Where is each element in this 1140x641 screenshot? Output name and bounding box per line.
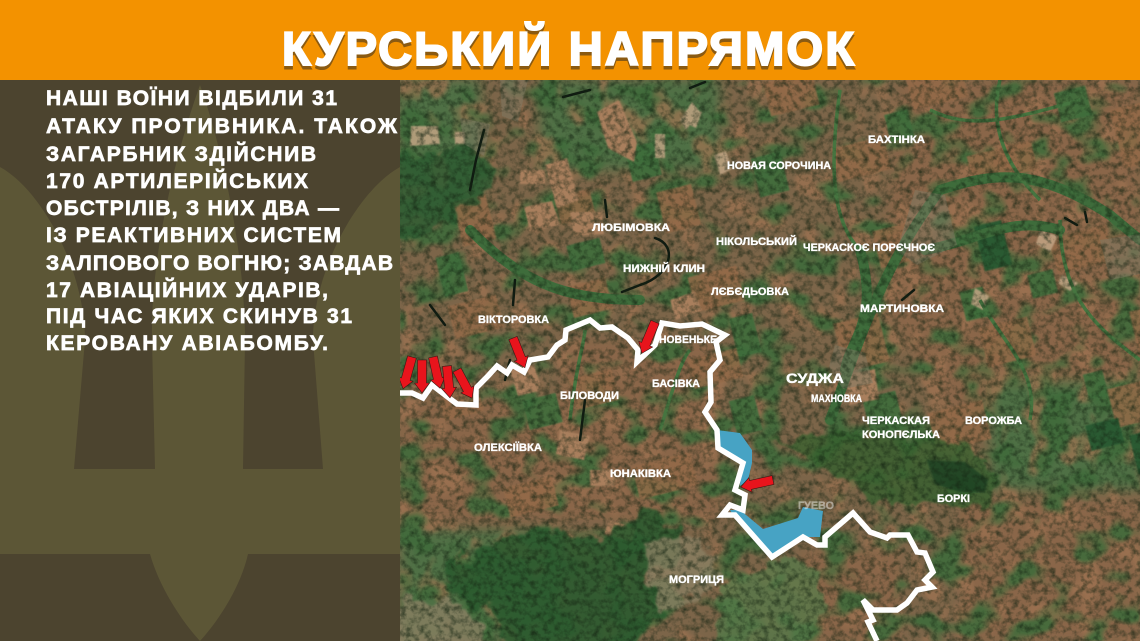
settlement labels: БОРКІ <box>937 493 970 505</box>
left text panel with trident background <box>0 80 400 641</box>
grey settlement patches <box>460 80 1140 389</box>
dark water lines <box>430 82 1087 440</box>
settlement labels: БАСІВКА <box>652 378 700 390</box>
top left forest <box>385 150 490 240</box>
green river valleys <box>470 177 1140 420</box>
body text block: КЕРОВАНУ АВІАБОМБУ. <box>46 332 328 355</box>
settlement labels: ЛЮБІМОВКА <box>592 222 670 234</box>
body text block: ІЗ РЕАКТИВНИХ СИСТЕМ <box>46 224 341 247</box>
central forest patches <box>770 430 1000 510</box>
arrow 1 <box>400 356 417 389</box>
settlement labels: БІЛОВОДИ <box>560 390 619 402</box>
body text block <box>46 87 398 355</box>
header bar <box>0 0 1140 80</box>
settlement labels: МАХНОВКА <box>811 393 862 405</box>
arrow 6 <box>508 336 528 368</box>
arrow 2 <box>414 360 430 393</box>
title: КУРСЬКИЙ НАПРЯМОК <box>282 22 854 75</box>
body text block: 17 АВІАЦІЙНИХ УДАРІВ, <box>46 278 328 302</box>
dark wood near Borki <box>927 460 988 492</box>
arrow 8 <box>740 475 774 493</box>
body text block: АТАКУ ПРОТИВНИКА. ТАКОЖ <box>46 115 398 138</box>
tilled and pale plots <box>410 100 1078 542</box>
settlement labels: ВОРОЖБА <box>965 415 1022 427</box>
settlement labels <box>474 134 1022 586</box>
settlement labels: ГУЕВО <box>798 500 834 512</box>
body text block: ЗАГАРБНИК ЗДІЙСНИВ <box>46 142 316 166</box>
red attack arrows <box>396 319 775 494</box>
body text block: ПІД ЧАС ЯКИХ СКИНУВ 31 <box>46 305 352 328</box>
body text block: ОБСТРІЛІВ, З НИХ ДВА — <box>46 197 339 220</box>
settlement labels: БАХТІНКА <box>868 134 925 146</box>
settlement labels: НІКОЛЬСЬКИЙ <box>716 235 797 248</box>
settlement labels: ЛЄБЄДЬОВКА <box>711 286 789 298</box>
settlement labels: ЮНАКІВКА <box>610 468 671 480</box>
arrow 3 <box>428 356 444 389</box>
body text block: 170 АРТИЛЕРІЙСЬКИХ <box>46 169 308 193</box>
settlement labels: КОНОПЄЛЬКА <box>862 429 940 441</box>
settlement labels: МАРТИНОВКА <box>860 303 944 315</box>
settlement labels: ЧЕРКАСКОЄ ПОРЄЧНОЄ <box>803 242 935 254</box>
satellite map <box>400 80 1140 641</box>
arrow 4 <box>441 365 457 398</box>
settlement labels: СУДЖА <box>786 370 844 386</box>
body text block: НАШІ ВОЇНИ ВІДБИЛИ 31 <box>46 87 337 110</box>
occupied area: blue zones <box>716 430 823 557</box>
settlement labels: НОВАЯ СОРОЧИНА <box>727 160 831 172</box>
settlement labels: МОГРИЦЯ <box>669 574 724 586</box>
settlement labels: ЧЕРКАСКАЯ <box>862 415 930 427</box>
settlement labels: ОЛЕКСІЇВКА <box>474 441 542 454</box>
ploughed and green fields <box>435 80 1140 518</box>
body text block: ЗАЛПОВОГО ВОГНЮ; ЗАВДАВ <box>46 252 393 275</box>
arrow 5 <box>452 368 474 398</box>
southern settlements and mixed land <box>395 535 725 641</box>
southern forest <box>445 515 680 641</box>
trident emblem <box>0 85 400 641</box>
title: КУРСЬКИЙ НАПРЯМОК <box>282 26 854 78</box>
arrow 7 <box>638 320 660 354</box>
settlement labels: НИЖНІЙ КЛИН <box>623 262 705 275</box>
settlement labels: НОВЕНЬКЕ <box>659 334 717 346</box>
settlement labels: ВІКТОРОВКА <box>478 314 549 326</box>
fine grain overlay <box>400 80 1140 641</box>
field patch texture <box>400 80 1140 641</box>
frontline: white border <box>400 320 933 641</box>
